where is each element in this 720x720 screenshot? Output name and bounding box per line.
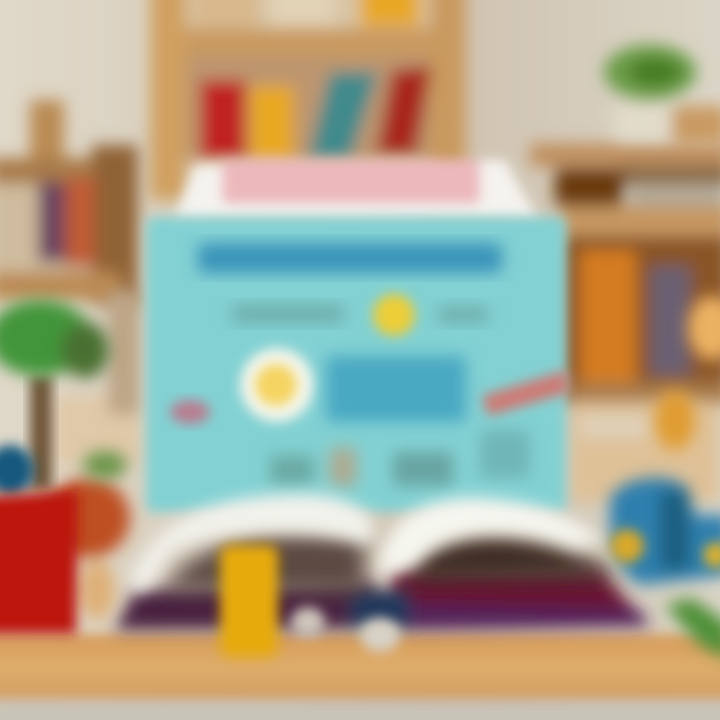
books on right shelf xyxy=(580,250,690,382)
lower left wall area xyxy=(55,290,140,465)
book coloured page edges xyxy=(115,570,650,630)
blue ball xyxy=(0,445,34,495)
yellow toy wheel xyxy=(610,529,720,568)
left page xyxy=(128,494,374,592)
books on centre shelf xyxy=(200,66,432,161)
wooden table xyxy=(0,634,720,720)
poster: teal panel xyxy=(146,217,566,512)
red pot xyxy=(0,490,78,634)
yellow figure bookmark xyxy=(220,545,278,657)
tan object and yellow toy at right xyxy=(655,296,720,450)
top shelf items xyxy=(195,0,420,26)
small white toys on table xyxy=(291,607,400,652)
dark page shadow xyxy=(165,534,618,592)
poster: small illustrations xyxy=(270,430,530,486)
centre bookshelf xyxy=(150,0,466,200)
plant leaves xyxy=(0,300,127,479)
blue toy at right xyxy=(610,478,720,660)
icon: yellow sun xyxy=(373,294,415,336)
poster: pink badge left xyxy=(170,400,210,424)
icon: white circle with yellow centre xyxy=(240,348,314,422)
right bookshelf xyxy=(530,143,720,502)
open book xyxy=(115,494,650,630)
plant pot and orange box xyxy=(614,104,720,144)
potted plant top right xyxy=(604,45,720,144)
poster: blue text block xyxy=(326,356,466,422)
poster: title bar xyxy=(198,243,502,273)
poster: faint text lines xyxy=(232,304,488,324)
poster: pink banner right xyxy=(482,370,570,416)
pot shadow body xyxy=(46,478,130,620)
left bookshelf xyxy=(0,100,138,305)
plant leaves xyxy=(604,45,696,99)
plant trunk xyxy=(30,375,52,490)
plant in red pot, left xyxy=(0,300,130,634)
right page xyxy=(378,498,604,578)
green toy piece xyxy=(665,598,720,660)
poster: back paper xyxy=(175,160,538,220)
